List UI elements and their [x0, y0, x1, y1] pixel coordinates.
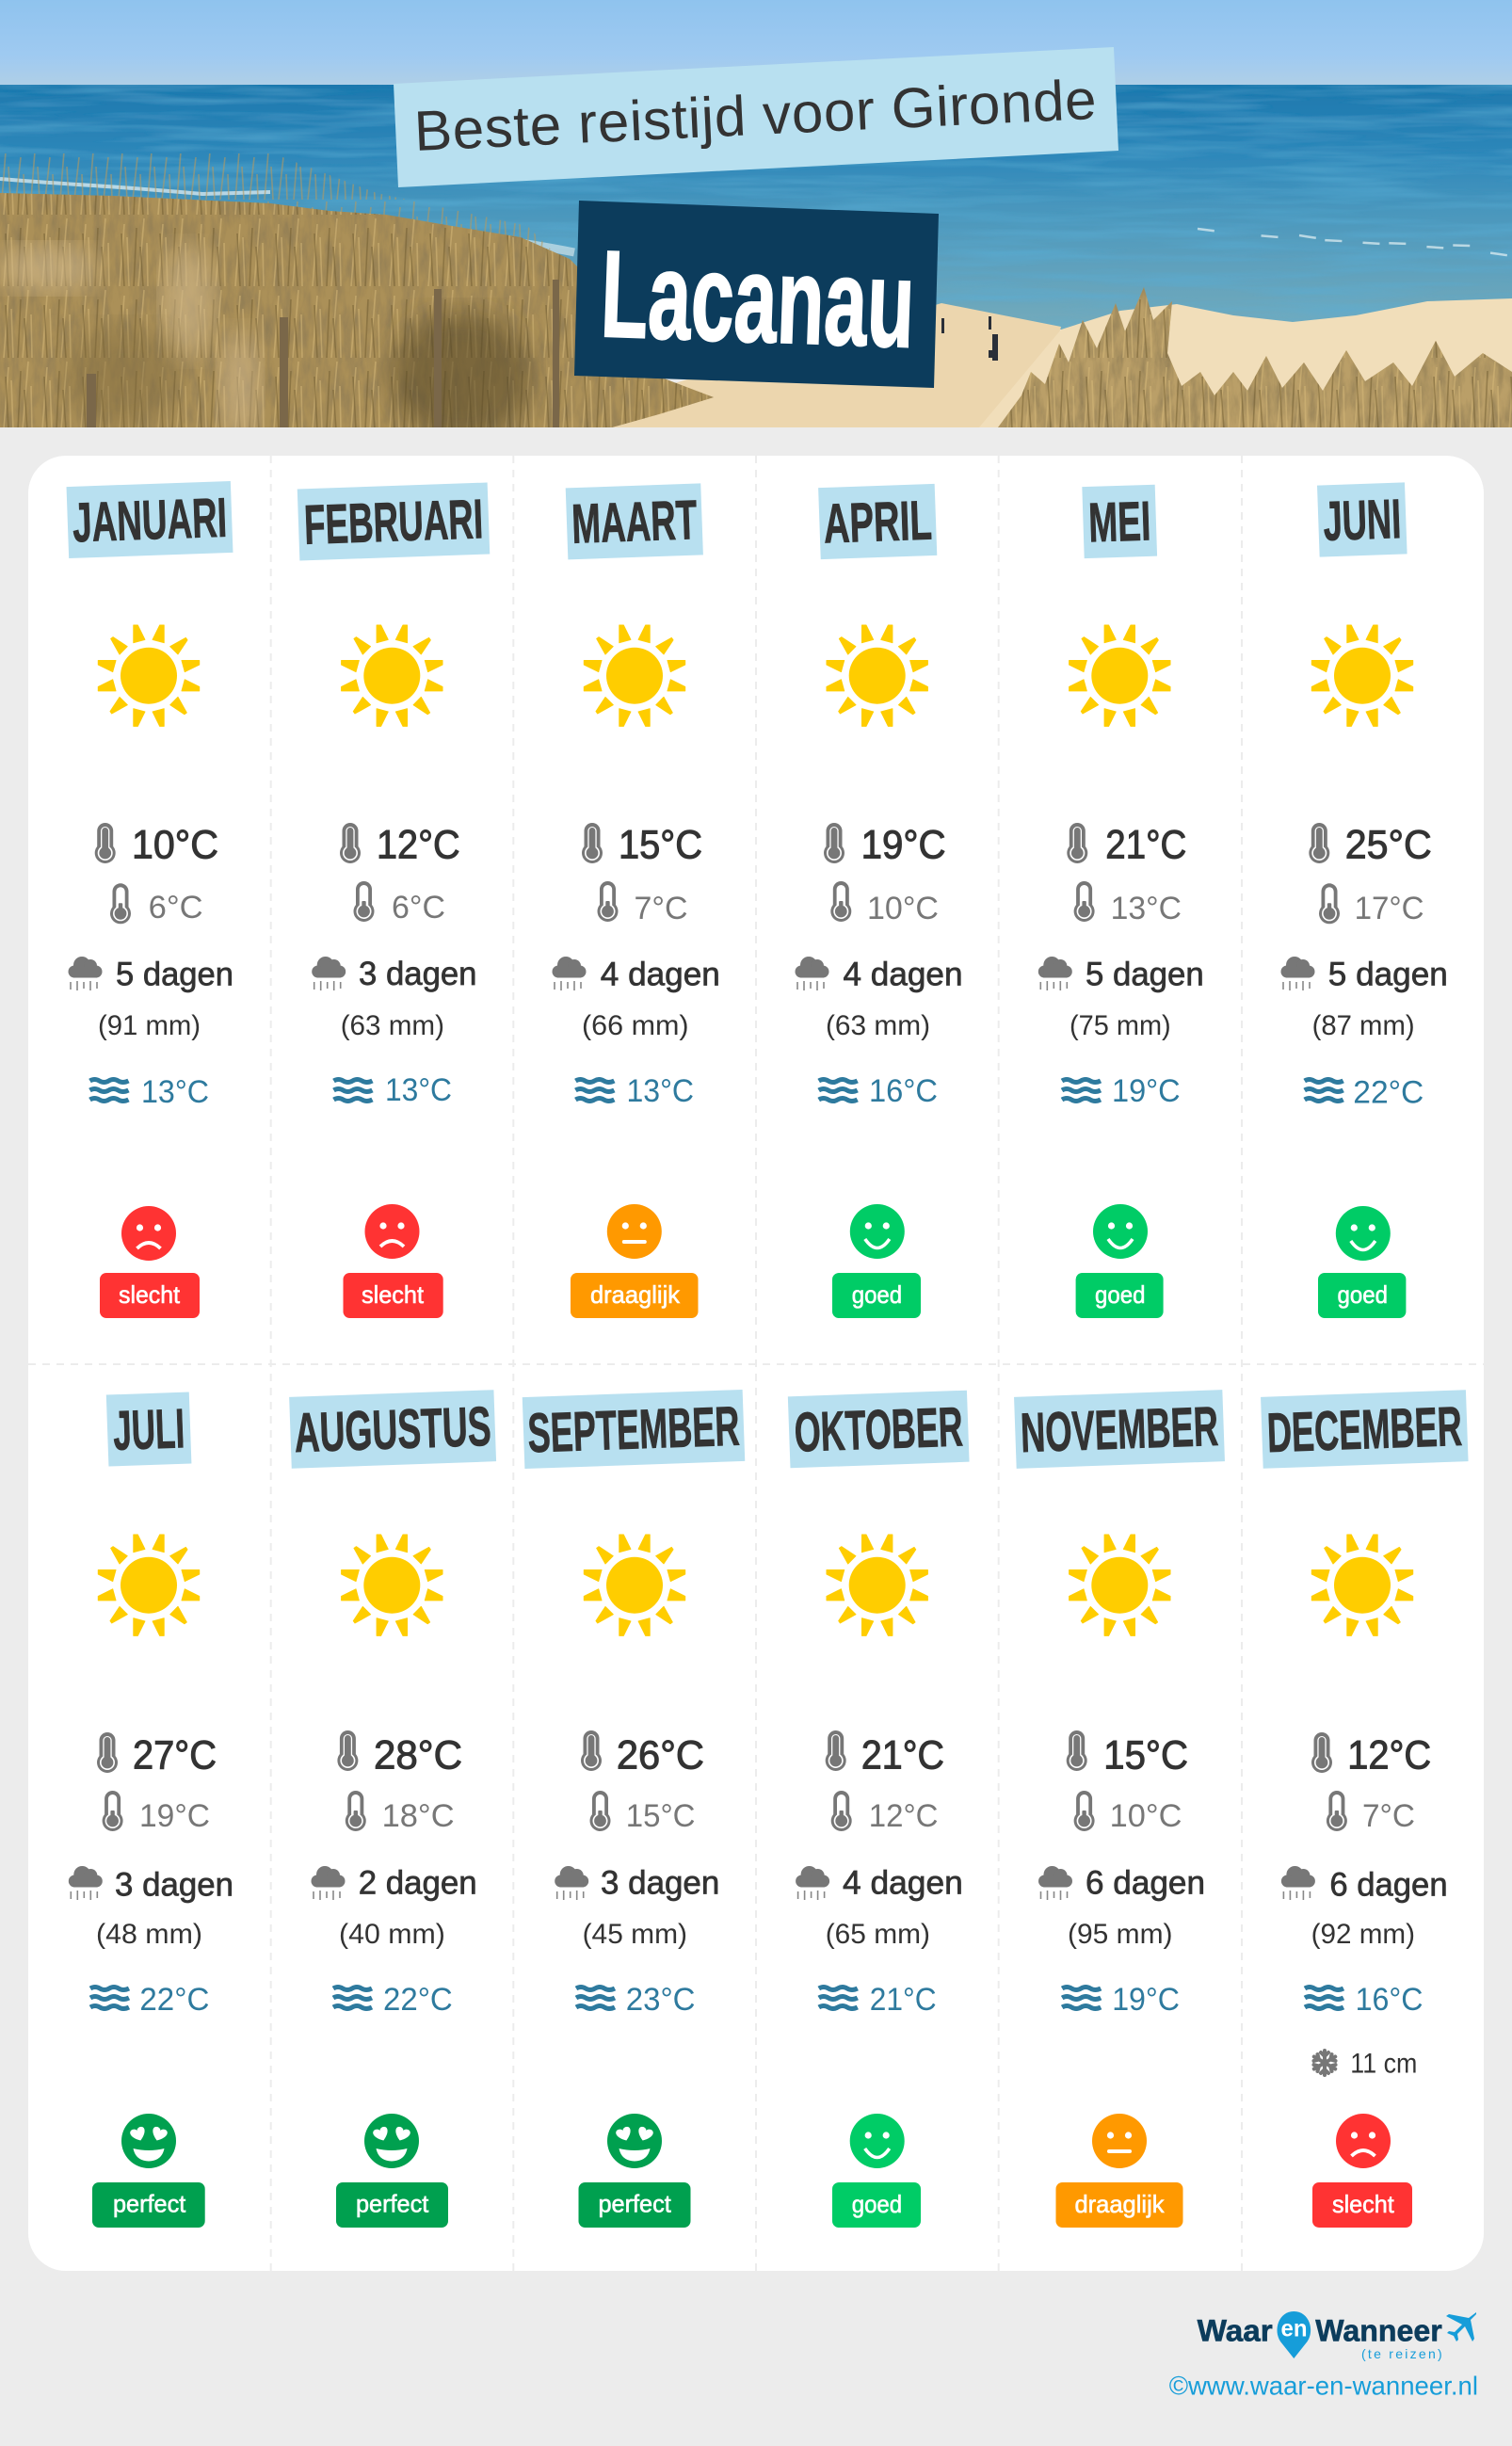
min temperature [831, 1791, 938, 1834]
max temperature [95, 823, 218, 868]
max temperature [337, 1730, 462, 1778]
icon: sad face [365, 1204, 420, 1259]
month: juni [1280, 482, 1448, 1318]
icon: sun [98, 1535, 200, 1635]
heading [1317, 482, 1407, 557]
rating badge [343, 1273, 443, 1318]
month: november [1014, 1390, 1225, 2228]
max temperature: 15°C [1103, 1732, 1188, 1778]
sea temperature [1062, 1982, 1180, 2018]
heading [818, 484, 937, 559]
rain days: 6 dagen [1329, 1866, 1448, 1903]
rainfall: (75 mm) [1070, 1010, 1171, 1041]
sea temperature: 16°C [869, 1073, 938, 1109]
sea temperature: 19°C [1112, 1982, 1180, 2018]
sea temperature [90, 1074, 209, 1110]
min temperature: 18°C [382, 1798, 455, 1834]
logo: Waar en Wanneer: en [1280, 2316, 1307, 2342]
min temperature: 7°C [635, 891, 687, 926]
min temperature [589, 1791, 695, 1834]
rain days: 4 dagen [844, 957, 962, 993]
snowfall: 11 cm [1350, 2049, 1417, 2080]
min temperature: 10°C [1110, 1798, 1182, 1834]
rainfall: (87 mm) [1312, 1010, 1415, 1041]
max temperature [582, 823, 702, 868]
max temperature: 15°C [619, 823, 702, 868]
rating badge [1076, 1273, 1164, 1318]
min temperature: 6°C [149, 890, 203, 925]
sea temperature: 13°C [385, 1072, 452, 1108]
rain days: 2 dagen [359, 1865, 477, 1902]
rainfall: (65 mm) [826, 1919, 930, 1950]
sea temperature [1305, 1075, 1424, 1111]
heading [289, 1390, 496, 1469]
hero photo: beach and dunes [0, 0, 1512, 443]
destination banner: Lacanau [599, 224, 917, 374]
icon: neutral face [1092, 2114, 1147, 2168]
rainfall: (92 mm) [1311, 1919, 1415, 1950]
rating badge [578, 2182, 691, 2228]
max temperature: 21°C [1105, 823, 1186, 868]
rain days: 3 dagen [601, 1865, 719, 1902]
icon: sun [342, 1535, 442, 1635]
heading [523, 1390, 745, 1469]
min temperature [346, 1791, 455, 1834]
min temperature [1074, 1791, 1182, 1834]
min temperature: 10°C [867, 891, 939, 926]
min temperature [110, 883, 203, 925]
rating badge: slecht [362, 1280, 425, 1309]
icon: sun [827, 625, 927, 726]
rating badge [1318, 1273, 1406, 1318]
heading [106, 1392, 191, 1467]
max temperature: 10°C [132, 823, 218, 868]
logo: Waar en Wanneer: Waar [1198, 2314, 1273, 2348]
heading: JANUARI [72, 487, 228, 554]
rating badge: draaglijk [1075, 2190, 1165, 2218]
min temperature: 19°C [139, 1798, 210, 1834]
min temperature [830, 881, 939, 926]
heading: MEI [1087, 490, 1151, 554]
min temperature: 15°C [626, 1798, 695, 1834]
icon: sun [342, 625, 442, 726]
max temperature [97, 1732, 217, 1778]
icon: sun [1311, 625, 1413, 726]
heading: JULI [112, 1397, 185, 1462]
sea temperature: 23°C [626, 1982, 695, 2018]
sea temperature [819, 1073, 938, 1109]
icon: neutral face [607, 1204, 662, 1259]
sea temperature: 22°C [139, 1982, 209, 2018]
month: februari [298, 482, 490, 1318]
rain days: 3 dagen [359, 956, 476, 992]
sea temperature [576, 1982, 695, 2018]
max temperature [824, 823, 946, 868]
heading: APRIL [823, 490, 933, 555]
rating badge: draaglijk [590, 1280, 681, 1309]
min temperature: 6°C [392, 890, 445, 925]
rating badge: goed [852, 2190, 902, 2218]
max temperature [340, 823, 460, 868]
month: maart [552, 483, 720, 1318]
month: januari [67, 481, 233, 1318]
month: december [1261, 1390, 1469, 2228]
title banner [394, 47, 1118, 187]
sea temperature [1062, 1073, 1181, 1109]
snowfall [1312, 2049, 1417, 2080]
max temperature: 27°C [133, 1732, 217, 1778]
rainfall: (63 mm) [826, 1010, 930, 1041]
rain days: 5 dagen [1328, 957, 1448, 993]
min temperature [103, 1791, 210, 1834]
icon: sun [584, 625, 685, 726]
sea temperature: 16°C [1356, 1982, 1423, 2018]
icon: heart-eyes face [121, 2114, 176, 2168]
min temperature [1074, 881, 1182, 926]
rating badge: slecht [119, 1280, 181, 1309]
sea temperature: 22°C [383, 1982, 453, 2018]
icon: smiling face [1336, 1206, 1391, 1261]
rain days: 3 dagen [115, 1866, 233, 1903]
heading [298, 482, 490, 561]
sea temperature [333, 1072, 452, 1108]
rating badge [571, 1273, 699, 1318]
month: juli [69, 1392, 233, 2228]
heading: AUGUSTUS [294, 1395, 492, 1464]
icon: heart-eyes face [364, 2114, 419, 2168]
icon: smiling face [850, 2114, 905, 2168]
rain days: 4 dagen [843, 1865, 963, 1902]
heading: NOVEMBER [1020, 1395, 1219, 1464]
rating badge: slecht [1332, 2190, 1394, 2218]
sea temperature [333, 1982, 453, 2018]
heading [67, 481, 233, 558]
rainfall: (66 mm) [582, 1010, 689, 1041]
calendar panel [28, 456, 1484, 2271]
max temperature: 28°C [374, 1732, 462, 1778]
heading [788, 1391, 970, 1468]
rating badge [1056, 2182, 1182, 2228]
heading: SEPTEMBER [526, 1395, 741, 1464]
icon: sun [1070, 1535, 1170, 1635]
icon: sun [584, 1535, 685, 1635]
rainfall: (48 mm) [96, 1919, 202, 1950]
rainfall: (45 mm) [583, 1919, 687, 1950]
heading: JUNI [1322, 488, 1402, 553]
website url: ©www.waar-en-wanneer.nl [1169, 2371, 1478, 2400]
rainfall: (95 mm) [1068, 1919, 1173, 1950]
min temperature [1319, 883, 1424, 926]
rating badge [832, 2182, 921, 2228]
month: september [523, 1390, 745, 2228]
rating badge: goed [1095, 1280, 1145, 1309]
icon: smiling face [1093, 1204, 1148, 1259]
sea temperature: 19°C [1112, 1073, 1181, 1109]
rating badge [100, 1273, 200, 1318]
sea temperature: 13°C [627, 1073, 694, 1109]
max temperature [826, 1730, 944, 1778]
max temperature [1311, 1732, 1431, 1778]
month: augustus [289, 1390, 496, 2228]
sea temperature: 13°C [141, 1074, 209, 1110]
icon: sun [98, 625, 200, 726]
icon: sad face [121, 1206, 176, 1261]
max temperature: 21°C [861, 1732, 944, 1778]
rain days: 5 dagen [1086, 957, 1204, 993]
max temperature: 12°C [1347, 1732, 1431, 1778]
destination banner [574, 201, 939, 388]
max temperature [1067, 1730, 1188, 1778]
max temperature: 19°C [861, 823, 946, 868]
logo: Waar en Wanneer: (te reizen) [1361, 2346, 1442, 2361]
rating badge: perfect [113, 2189, 186, 2217]
max temperature: 26°C [617, 1732, 704, 1778]
icon: sun [1311, 1535, 1413, 1635]
max temperature [581, 1730, 704, 1778]
month: oktober [788, 1391, 970, 2228]
rainfall: (40 mm) [339, 1919, 445, 1950]
min temperature: 12°C [869, 1798, 938, 1834]
sea temperature: 22°C [1353, 1075, 1424, 1111]
title banner: Beste reistijd voor Gironde [412, 68, 1098, 163]
sea temperature [575, 1073, 694, 1109]
icon: sun [1070, 625, 1170, 726]
rating badge: perfect [356, 2189, 429, 2217]
max temperature: 12°C [377, 823, 460, 868]
month: april [795, 484, 962, 1318]
rating badge [92, 2182, 205, 2228]
min temperature: 17°C [1355, 891, 1424, 926]
month: mei [1038, 485, 1204, 1318]
sea temperature: 21°C [870, 1982, 937, 2018]
sea temperature [1305, 1982, 1423, 2018]
rating badge: goed [1337, 1280, 1388, 1309]
min temperature: 7°C [1362, 1798, 1415, 1834]
logo: Waar en Wanneer [1198, 2311, 1476, 2361]
rain days: 5 dagen [116, 957, 233, 993]
min temperature [1327, 1791, 1415, 1834]
sea temperature [90, 1982, 209, 2018]
logo: Waar en Wanneer: Wanneer [1315, 2314, 1442, 2348]
rating badge [1312, 2182, 1412, 2228]
heading [566, 483, 703, 559]
icon: sad face [1336, 2114, 1391, 2168]
heading: FEBRUARI [303, 488, 484, 556]
rainfall: (63 mm) [341, 1010, 444, 1041]
icon: smiling face [850, 1204, 905, 1259]
max temperature [1309, 823, 1432, 868]
rain days: 4 dagen [601, 957, 720, 993]
rain days: 6 dagen [1086, 1865, 1205, 1902]
icon: sun [827, 1535, 927, 1635]
min temperature [597, 881, 687, 926]
max temperature [1067, 823, 1186, 868]
heading [1082, 485, 1157, 558]
sea temperature [819, 1982, 937, 2018]
rating badge: goed [852, 1280, 902, 1309]
rating badge: perfect [599, 2189, 672, 2217]
heading: MAART [571, 489, 698, 555]
heading [1014, 1390, 1225, 1469]
rainfall: (91 mm) [98, 1010, 201, 1041]
min temperature: 13°C [1111, 891, 1182, 926]
max temperature: 25°C [1345, 823, 1432, 868]
icon: heart-eyes face [607, 2114, 662, 2168]
rain days [1281, 1866, 1448, 1903]
heading: OKTOBER [794, 1395, 964, 1464]
rating badge [336, 2182, 448, 2228]
rating badge [832, 1273, 921, 1318]
min temperature [354, 881, 445, 925]
